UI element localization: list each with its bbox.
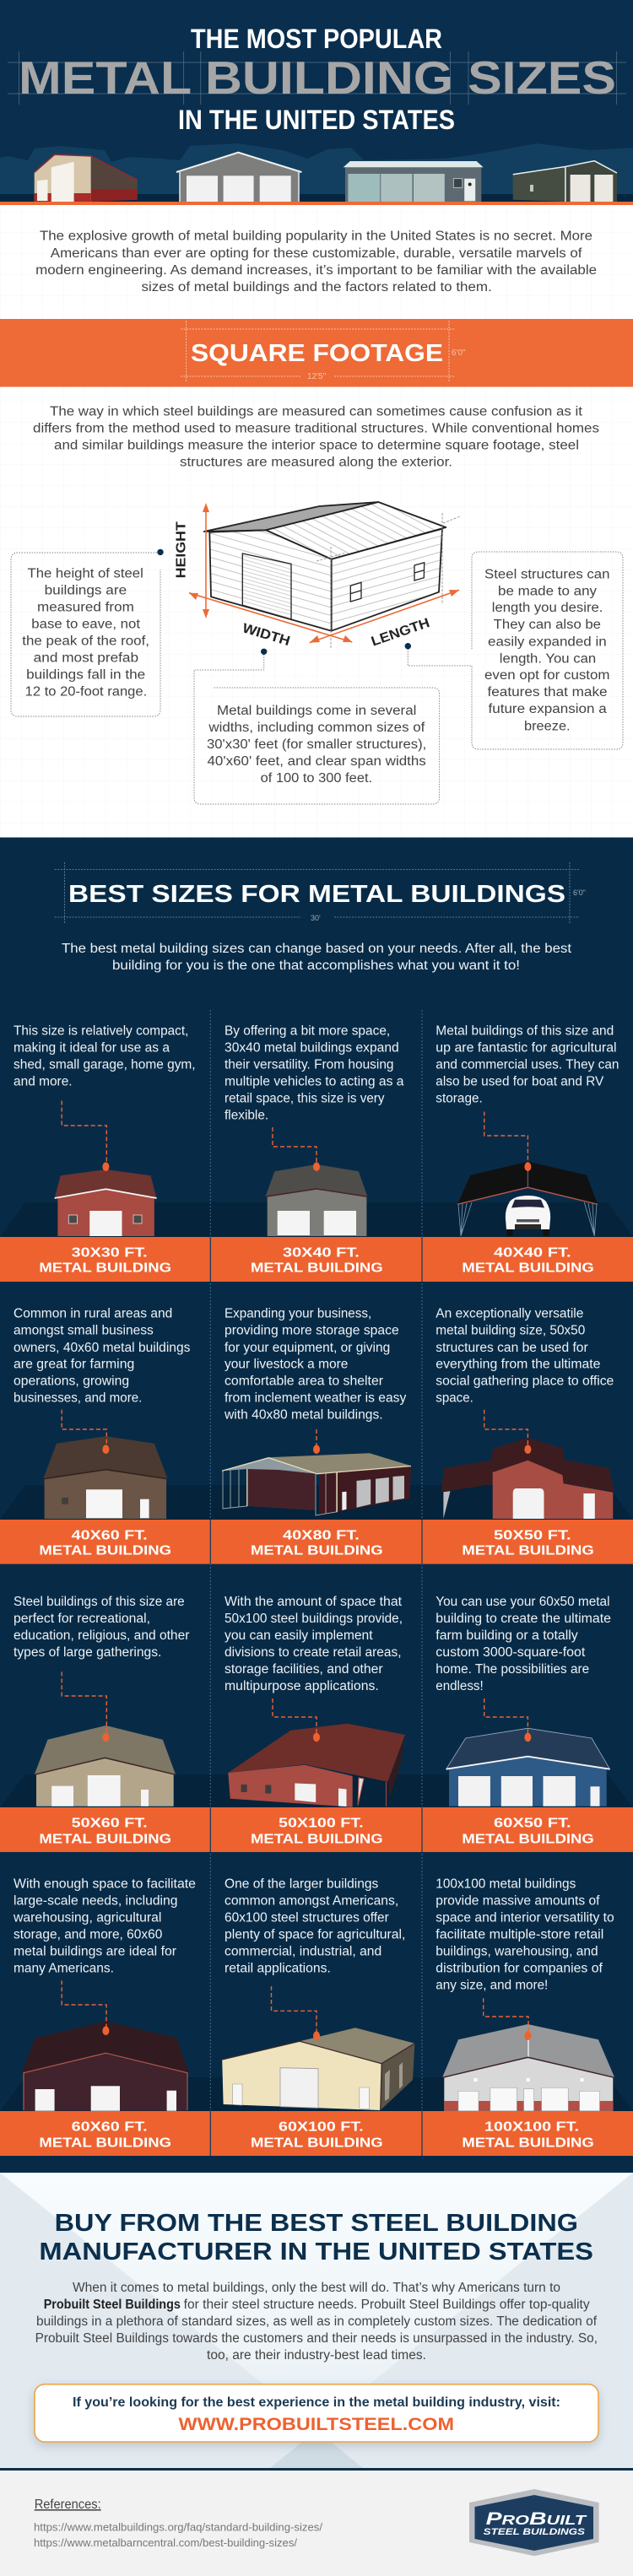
callout: height: measured from [37, 601, 134, 614]
callout: height: 12 to 20-foot range. [25, 685, 147, 699]
description: One of the larger buildings [225, 1877, 379, 1892]
card: 60x60 [13, 1877, 196, 2111]
description: divisions to create retail areas, [225, 1645, 402, 1660]
label bar: row 4: 60X100 FT. [279, 2120, 364, 2135]
illustration: blue barn [446, 1728, 609, 1806]
description: education, religious, and other [14, 1628, 189, 1643]
references: https://www.metalbuildings.org/faq/standard-building-sizes/ [34, 2521, 322, 2533]
description: amongst small business [14, 1323, 154, 1337]
card: 100x100 [436, 1877, 614, 2111]
label: width: WIDTH [241, 621, 292, 649]
label bar: row 4: METAL BUILDING [462, 2136, 594, 2150]
label bar: row 1: METAL BUILDING [251, 1261, 383, 1276]
call-to-action box: If you’re looking for the best experience in the metal building industry, visit: [73, 2395, 560, 2410]
heading: best sizes [55, 862, 586, 924]
panel: call to action [0, 2173, 633, 2468]
description: operations, growing [14, 1374, 129, 1388]
description: you can easily implement [225, 1628, 373, 1643]
description: everything from the ultimate [436, 1357, 601, 1371]
callout: width: 30'x30' feet (for smaller structures), [207, 737, 426, 752]
illustration: cream building [222, 2028, 414, 2110]
illustration: maroon barn [21, 2022, 189, 2111]
callout: width: 40'x60' feet, and clear span widths [208, 754, 426, 769]
description: with 40x80 metal buildings. [224, 1407, 383, 1422]
description: providing more storage space [225, 1323, 399, 1337]
label bar: row 1 [0, 1237, 633, 1282]
illustration: white and red warehouse [442, 2024, 614, 2111]
label: length: LENGTH [370, 616, 431, 650]
label bar: row 3: 50X100 FT. [279, 1816, 364, 1831]
references: References: [35, 2498, 101, 2512]
illustration: carport with car [457, 1162, 598, 1236]
text: best sizes intro [62, 942, 572, 973]
text: best sizes intro: The best metal building sizes can change based on your needs. After all, the best [62, 942, 572, 956]
arrow: length [310, 590, 459, 643]
illustration: gray barn [265, 1164, 367, 1236]
description: 60x100 steel structures offer [225, 1911, 389, 1925]
description: buildings, warehousing, and [436, 1945, 598, 1959]
label bar: row 4: METAL BUILDING [39, 2136, 171, 2150]
description: retail space, this size is very [225, 1092, 385, 1105]
diagram: building dimensions [174, 502, 460, 650]
callout: length [405, 552, 623, 749]
description: custom 3000-square-foot [436, 1645, 586, 1660]
connector [62, 1100, 109, 1171]
callout: height: buildings are [45, 584, 127, 597]
description [13, 1877, 196, 1976]
references: https://www.metalbarncentral.com/best-building-sizes/ [34, 2536, 297, 2549]
description: storage. [436, 1092, 483, 1105]
description: metal building size, 50x50 [436, 1323, 586, 1337]
description [14, 1307, 191, 1405]
connector [484, 1112, 531, 1171]
description [436, 1595, 611, 1693]
title: IN THE UNITED STATES [178, 105, 455, 135]
panel: square footage content [0, 386, 633, 837]
description: distribution for companies of [436, 1962, 603, 1976]
description: building to create the ultimate [436, 1612, 611, 1626]
label bar: row 2: 40X80 FT. [283, 1529, 360, 1542]
description: retail applications. [225, 1962, 331, 1976]
description: many Americans. [14, 1962, 114, 1976]
paragraph: and similar buildings measure the interior space to determine square footage, steel [54, 438, 579, 452]
description: structures can be used for [436, 1341, 588, 1355]
card: 50x100 [225, 1595, 405, 1807]
illustration: tan barn [35, 1725, 176, 1806]
callout: height: The height of steel [27, 566, 143, 581]
description: home. The possibilities are [436, 1662, 589, 1677]
panel: introduction [0, 205, 633, 319]
description: An exceptionally versatile [436, 1307, 583, 1321]
callout: length: breeze. [524, 719, 571, 733]
description [225, 1024, 404, 1122]
heading: MANUFACTURER IN THE UNITED STATES [39, 2238, 593, 2265]
illustration: red barn [55, 1169, 157, 1236]
panel: best sizes background [0, 837, 633, 2173]
arrow: width [189, 593, 352, 642]
callout: height: the peak of the roof, [22, 635, 149, 649]
connector [273, 1127, 320, 1171]
description: common amongst Americans, [225, 1894, 398, 1909]
label bar: row 4: 100X100 FT. [484, 2120, 579, 2135]
intro text: modern engineering. As demand increases, it’s important to be familiar with the available [35, 263, 597, 278]
logo: ProBuilt Steel Buildings [469, 2489, 599, 2556]
callout: width: Metal buildings come in several [217, 704, 416, 718]
description: perfect for recreational, [14, 1612, 150, 1626]
callout: length: easily expanded in [488, 635, 607, 649]
description: space and interior versatility to [436, 1911, 614, 1925]
description [225, 1877, 405, 1976]
panel: footer [0, 2468, 633, 2576]
description: for your equipment, or giving [225, 1341, 390, 1355]
callout: height [11, 549, 164, 716]
orange rule [0, 202, 633, 205]
heading: best sizes: BEST SIZES FOR METAL BUILDINGS [68, 881, 565, 908]
description: provide massive amounts of [436, 1894, 600, 1909]
label bar: row 3: METAL BUILDING [39, 1833, 171, 1846]
paragraph: too, are their industry-best lead times. [207, 2348, 426, 2363]
intro text: Americans than ever are opting for these customizable, durable, versatile marvels of [51, 246, 582, 261]
callout: height: base to eave, not [31, 617, 141, 631]
paragraph [35, 2281, 598, 2363]
card: 50x50 [436, 1307, 614, 1519]
heading: best sizes: 30' [311, 914, 321, 922]
description: Metal buildings of this size and [436, 1024, 614, 1038]
description [14, 1024, 196, 1089]
paragraph: differs from the method used to measure traditional structures. While conventional homes [33, 421, 599, 435]
description: You can use your 60x50 metal [436, 1595, 609, 1609]
card: 40x60 [14, 1307, 191, 1519]
description: With enough space to facilitate [14, 1877, 196, 1892]
label bar: row 3: METAL BUILDING [251, 1833, 383, 1846]
text: best sizes intro: building for you is the one that accomplishes what you want it to! [112, 959, 520, 973]
description: This size is relatively compact, [14, 1024, 188, 1038]
panel: square footage heading band [0, 319, 633, 386]
call-to-action box: WWW.PROBUILTSTEEL.COM [179, 2415, 454, 2434]
callout: length: length. You can [500, 651, 596, 666]
connector [484, 1410, 531, 1454]
references [34, 2498, 322, 2549]
connector [484, 1698, 531, 1742]
label bar: row 2: METAL BUILDING [39, 1544, 171, 1558]
ground shading [0, 1202, 633, 2111]
description: your livestock a more [225, 1357, 348, 1371]
label bar: row 4 [0, 2111, 633, 2156]
description: storage facilities, and other [225, 1662, 383, 1677]
description: Common in rural areas and [14, 1307, 172, 1321]
building: gray three-door garage [176, 153, 301, 202]
description: multiple vehicles to acting as a [225, 1075, 404, 1089]
connector [272, 1986, 320, 2040]
label bar: row 1: METAL BUILDING [462, 1261, 594, 1276]
label bar: row 2: METAL BUILDING [251, 1544, 383, 1558]
description [225, 1595, 403, 1693]
label bar: row 2: 50X50 FT. [494, 1529, 571, 1542]
description: With the amount of space that [225, 1595, 403, 1609]
paragraph [33, 405, 599, 470]
paragraph: The way in which steel buildings are measured can sometimes cause confusion as it [50, 405, 583, 419]
description: Expanding your business, [225, 1307, 371, 1321]
label bar: row 2: 40X60 FT. [72, 1529, 148, 1542]
arrow: height [203, 503, 209, 618]
connector [313, 1429, 320, 1454]
paragraph: buildings in a plethora of standard sizes, as well as in completely custom sizes. The dedication of [36, 2314, 598, 2329]
description: making it ideal for use as a [14, 1040, 170, 1055]
skyline background [0, 143, 633, 194]
callout: width: of 100 to 300 feet. [261, 771, 372, 786]
illustration: red barn with side wings [441, 1438, 614, 1519]
description: businesses, and more. [14, 1391, 142, 1405]
intro text [35, 230, 597, 294]
callout: length: Steel structures can [484, 567, 609, 581]
label bar: row 3: METAL BUILDING [462, 1833, 594, 1846]
connector [62, 1410, 109, 1454]
callout: length: be made to any [498, 584, 597, 598]
callout: length: even opt for custom [484, 668, 609, 683]
label bar: row 4: METAL BUILDING [251, 2136, 383, 2150]
building: flat roof garage [344, 161, 484, 202]
building: dark green garage [513, 161, 617, 202]
label: height: HEIGHT [174, 521, 189, 578]
label bar: row 2 [0, 1520, 633, 1564]
description: commercial, industrial, and [225, 1945, 381, 1959]
illustration: long maroon building with lean-to [222, 1453, 411, 1515]
description: space. [436, 1391, 473, 1405]
illustration: brown barn [43, 1436, 168, 1519]
title: THE MOST POPULAR [191, 24, 442, 54]
intro text: sizes of metal buildings and the factors related to them. [142, 280, 492, 294]
description: 30x40 metal buildings expand [225, 1040, 399, 1055]
card: 40x80 [222, 1307, 411, 1515]
connector [484, 1998, 531, 2040]
description: shed, small garage, home gym, [14, 1058, 196, 1072]
description: comfortable area to shelter [225, 1374, 383, 1388]
description: endless! [436, 1679, 484, 1693]
description: 50x100 steel buildings provide, [225, 1612, 403, 1626]
description: and more. [14, 1075, 73, 1089]
label bar: row 3 [0, 1807, 633, 1852]
callout: length: features that make [488, 685, 608, 699]
card: 40x40 [436, 1024, 619, 1236]
description: any size, and more! [436, 1979, 548, 1993]
description: By offering a bit more space, [225, 1024, 390, 1038]
description: metal buildings are ideal for [14, 1945, 176, 1959]
building: tan and red garage [35, 154, 138, 202]
callout: width: widths, including common sizes of [208, 721, 425, 735]
description: plenty of space for agricultural, [225, 1928, 405, 1942]
card: 60x100 [222, 1877, 414, 2110]
description: flexible. [225, 1108, 268, 1122]
label bar: row 1: 30X30 FT. [72, 1245, 148, 1261]
title [8, 24, 626, 135]
label bar: row 1: 40X40 FT. [494, 1245, 571, 1261]
heading: best sizes: 6'0" [573, 888, 586, 897]
card: 60x50 [436, 1595, 611, 1806]
paragraph: Probuilt Steel Buildings towards the customers and their needs is unsurpassed in the industry. So, [35, 2331, 598, 2346]
connector [273, 1698, 320, 1742]
connector [62, 1980, 109, 2035]
callout: width [194, 649, 440, 804]
callout: height: buildings fall in the [26, 667, 145, 682]
description [436, 1307, 614, 1405]
description: farm building or a totally [436, 1628, 578, 1643]
paragraph: Probuilt Steel Buildings [44, 2298, 181, 2312]
description: and commercial uses. They can [436, 1058, 619, 1072]
panel: header [0, 0, 633, 205]
description [224, 1307, 407, 1422]
label bar: row 3: 60X50 FT. [494, 1816, 571, 1831]
description: storage, and more, 60x60 [14, 1928, 163, 1942]
callout: length: length you desire. [492, 601, 603, 615]
paragraph: structures are measured along the exterior. [180, 456, 452, 470]
heading: BUY FROM THE BEST STEEL BUILDING [55, 2210, 578, 2237]
heading [39, 2210, 593, 2265]
paragraph: for their steel structure needs. Probuilt Steel Buildings offer top-quality [184, 2298, 590, 2312]
description: types of large gatherings. [14, 1645, 161, 1660]
description: are great for farming [14, 1357, 134, 1371]
label bar: row 1: 30X40 FT. [283, 1245, 360, 1261]
callout: height: and most prefab [34, 651, 138, 665]
description [14, 1595, 189, 1660]
title: METAL BUILDING SIZES [19, 51, 616, 104]
description [436, 1877, 614, 1993]
description: facilitate multiple-store retail [436, 1928, 603, 1942]
description [436, 1024, 619, 1105]
label bar: row 3: 50X60 FT. [72, 1816, 148, 1831]
description: owners, 40x60 metal buildings [14, 1341, 191, 1355]
panel: square footage heading band: 6'0" [452, 348, 466, 358]
description: their versatility. From housing [225, 1058, 393, 1072]
heading: SQUARE FOOTAGE [191, 340, 443, 367]
description: large-scale needs, including [14, 1894, 177, 1909]
label bar: row 4: 60X60 FT. [72, 2120, 148, 2135]
description: Steel buildings of this size are [14, 1595, 185, 1609]
label bar: row 1: METAL BUILDING [39, 1261, 171, 1276]
description: warehousing, agricultural [13, 1911, 161, 1925]
illustration: red building with open side [228, 1724, 405, 1807]
description: up are fantastic for agricultural [436, 1040, 617, 1055]
description: also be used for boat and RV [436, 1075, 604, 1089]
logo: ProBuilt Steel Buildings: P RO B UILT [486, 2509, 587, 2529]
intro text: The explosive growth of metal building popularity in the United States is no secret. More [40, 230, 592, 243]
description: social gathering place to office [436, 1374, 614, 1388]
label bar: row 2: METAL BUILDING [462, 1544, 594, 1558]
description: multipurpose applications. [225, 1679, 379, 1693]
paragraph: When it comes to metal buildings, only the best will do. That’s why Americans turn to [73, 2281, 560, 2295]
card: 50x60 [14, 1595, 189, 1806]
card: 30x30 [14, 1024, 196, 1236]
panel: square footage heading band: 12'5" [307, 372, 327, 381]
logo: ProBuilt Steel Buildings: STEEL BUILDINGS [484, 2527, 586, 2537]
description: from inclement weather is easy [225, 1391, 407, 1405]
callout: length: They can also be [494, 618, 601, 632]
description: 100x100 metal buildings [436, 1877, 576, 1892]
callout: length: future expansion a [488, 702, 607, 716]
call-to-action box [35, 2384, 598, 2442]
connector [62, 1671, 109, 1742]
card: 30x40 [225, 1024, 404, 1236]
